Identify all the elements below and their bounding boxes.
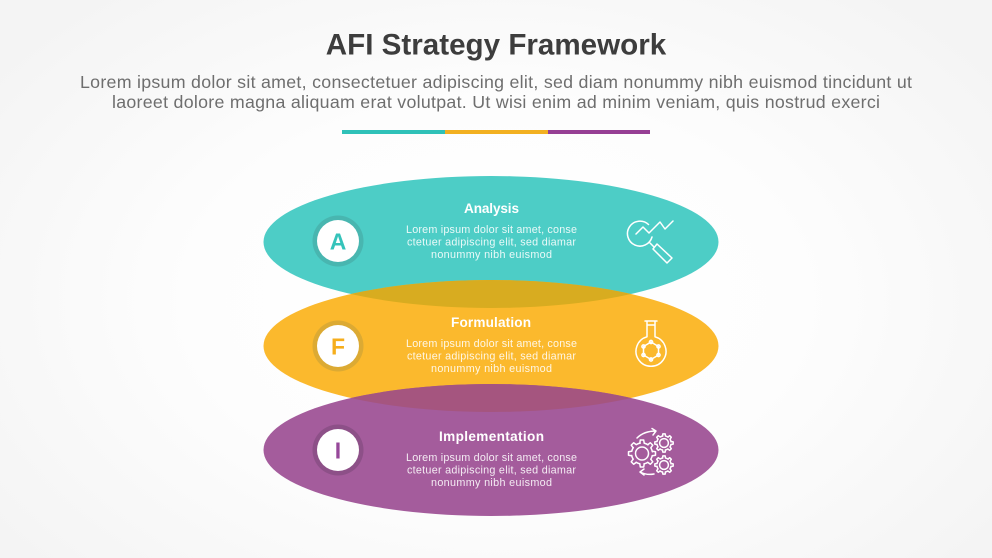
text block: Formulation: ctetuer adipiscing elit, sed diamar <box>407 350 576 362</box>
text block: Implementation: nonummy nibh euismod <box>431 477 552 489</box>
badge: A: A <box>330 228 346 254</box>
subtitle text: laoreet dolore magna aliquam erat volutpat. Ut wisi enim ad minim veniam, quis nostrud exerci <box>112 92 880 112</box>
badge: I: I <box>335 438 341 464</box>
divider: three-colour bar <box>342 130 650 134</box>
badge: F: F <box>331 334 345 360</box>
ellipse: Formulation <box>264 280 718 412</box>
badge: F <box>312 320 364 372</box>
icon: magnifier over trend line <box>627 221 673 263</box>
overlap: Analysis and Formulation <box>351 280 631 308</box>
text block: Analysis: ctetuer adipiscing elit, sed diamar <box>407 236 576 248</box>
text block: Analysis <box>406 201 577 261</box>
text block: Implementation: Implementation <box>439 429 544 444</box>
text block: Formulation <box>406 315 577 375</box>
badge: A <box>312 216 364 266</box>
ellipse: Implementation <box>264 384 718 516</box>
text block: Analysis: nonummy nibh euismod <box>431 249 552 261</box>
subtitle text: Lorem ipsum dolor sit amet, consectetuer adipiscing elit, sed diam nonummy nibh euismod tincidunt ut <box>80 72 912 92</box>
text block: Implementation <box>406 429 577 489</box>
text block: Formulation: nonummy nibh euismod <box>431 363 552 375</box>
title: AFI Strategy Framework <box>326 28 667 62</box>
badge: I <box>312 424 364 476</box>
subtitle text <box>80 72 912 112</box>
text block: Analysis: Analysis <box>464 201 519 216</box>
icon: flask <box>636 321 666 366</box>
text block: Formulation: Formulation <box>451 315 531 330</box>
text block: Formulation: Lorem ipsum dolor sit amet, conse <box>406 338 577 350</box>
ellipse: Analysis <box>264 176 718 308</box>
icon: gears with cycle arrows <box>628 428 673 475</box>
text block: Analysis: Lorem ipsum dolor sit amet, conse <box>406 224 577 236</box>
text block: Implementation: Lorem ipsum dolor sit amet, conse <box>406 452 577 464</box>
text block: Implementation: ctetuer adipiscing elit, sed diamar <box>407 464 576 476</box>
overlap: Formulation and Implementation <box>352 384 630 412</box>
